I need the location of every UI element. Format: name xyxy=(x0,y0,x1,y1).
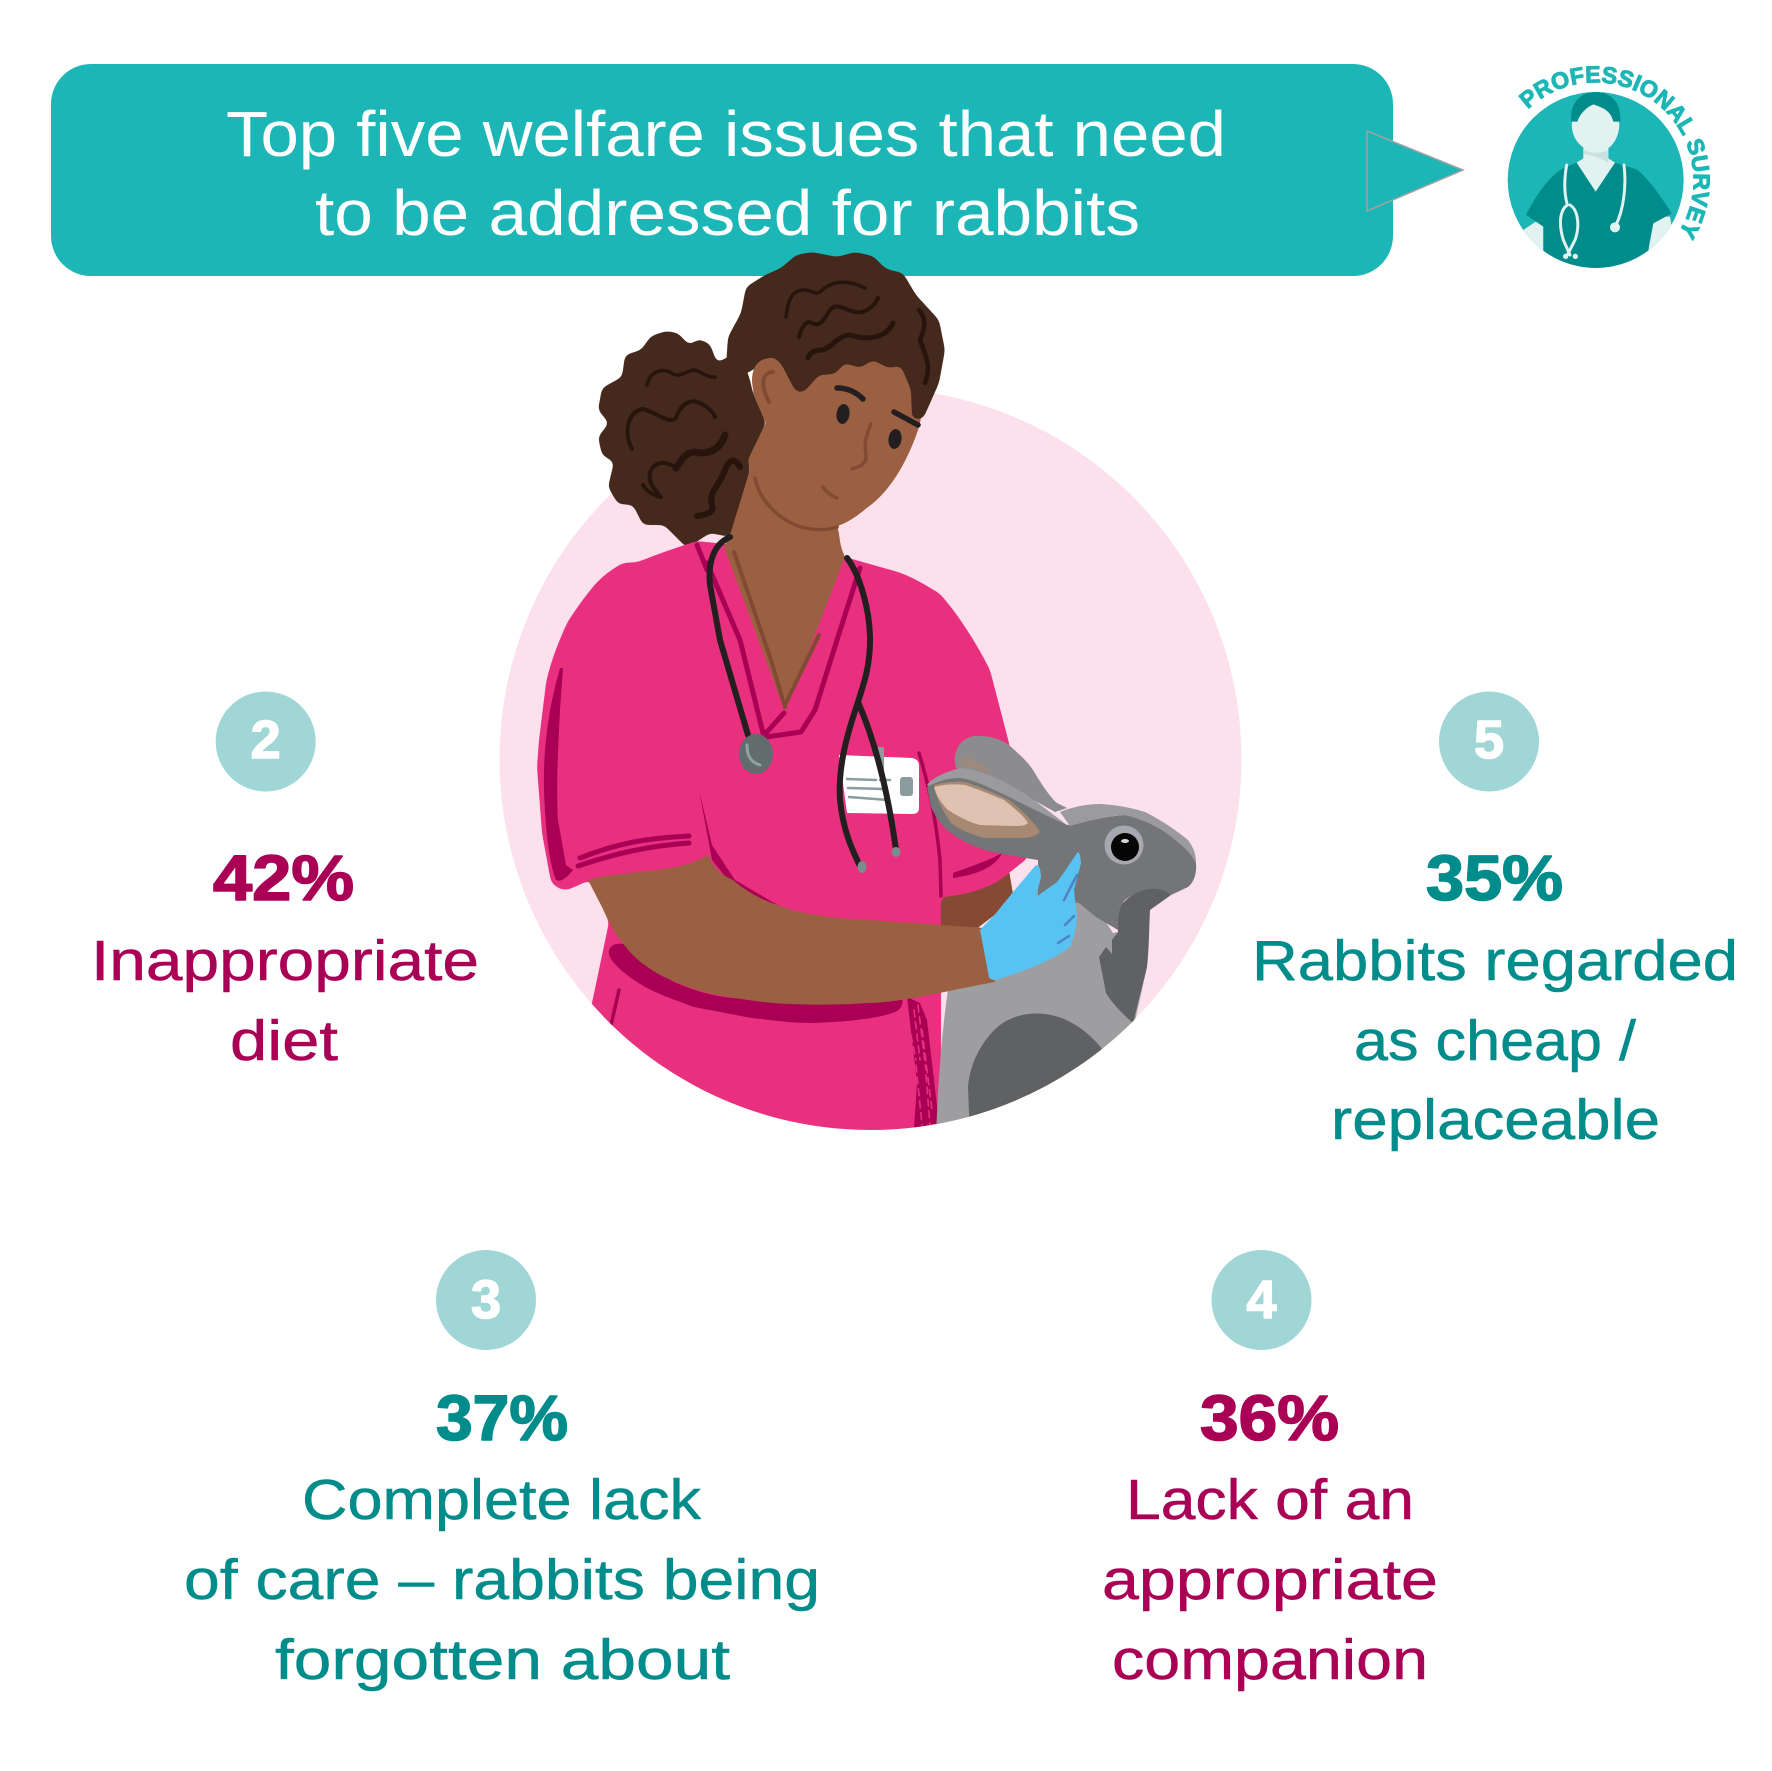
scrubs top xyxy=(537,541,1026,1130)
item 5: 35% xyxy=(1426,842,1563,914)
item 3: 37% xyxy=(436,1382,568,1454)
ear xyxy=(752,358,788,416)
item 3: 3 xyxy=(471,1270,501,1330)
item 5: as cheap / xyxy=(1354,1009,1636,1073)
scrub shading xyxy=(544,545,1002,1128)
item 2: 42% xyxy=(213,842,354,914)
item 3 xyxy=(184,1250,820,1692)
item 5: 5 xyxy=(1474,710,1504,770)
title banner xyxy=(51,64,1463,276)
stethoscope xyxy=(710,537,900,873)
item 4: companion xyxy=(1112,1628,1428,1692)
item 4: 36% xyxy=(1200,1382,1339,1454)
item 4: appropriate xyxy=(1102,1548,1438,1612)
ID badge xyxy=(839,747,919,814)
item 2 xyxy=(91,692,479,1073)
hair ponytail xyxy=(598,331,766,548)
item 2: Inappropriate xyxy=(91,929,479,993)
near arm xyxy=(588,855,995,1005)
hair top xyxy=(725,252,945,419)
item 3: of care – rabbits being xyxy=(184,1548,820,1612)
face and neck xyxy=(724,358,921,706)
blue glove xyxy=(980,852,1081,980)
face details xyxy=(734,388,918,707)
item 4: 4 xyxy=(1246,1270,1277,1330)
item 4: Lack of an xyxy=(1126,1468,1414,1532)
illustration: vet holding a rabbit xyxy=(537,252,1196,1200)
pink background circle xyxy=(500,388,1242,1130)
rabbit xyxy=(927,736,1196,1140)
item 5 xyxy=(1252,692,1738,1152)
title banner: Top five welfare issues that need xyxy=(226,98,1226,170)
item 2: diet xyxy=(230,1009,338,1073)
item 2: 2 xyxy=(251,710,281,770)
hair curls xyxy=(628,282,928,516)
item 3: forgotten about xyxy=(275,1628,730,1692)
icon: professional survey badge: PROFESSIONAL SURVEY xyxy=(1518,66,1710,241)
far arm xyxy=(940,872,1013,928)
item 5: Rabbits regarded xyxy=(1252,929,1738,993)
item 3: Complete lack xyxy=(302,1468,702,1532)
item 5: replaceable xyxy=(1331,1088,1660,1152)
title banner: to be addressed for rabbits xyxy=(315,177,1140,249)
item 4 xyxy=(1102,1250,1438,1692)
